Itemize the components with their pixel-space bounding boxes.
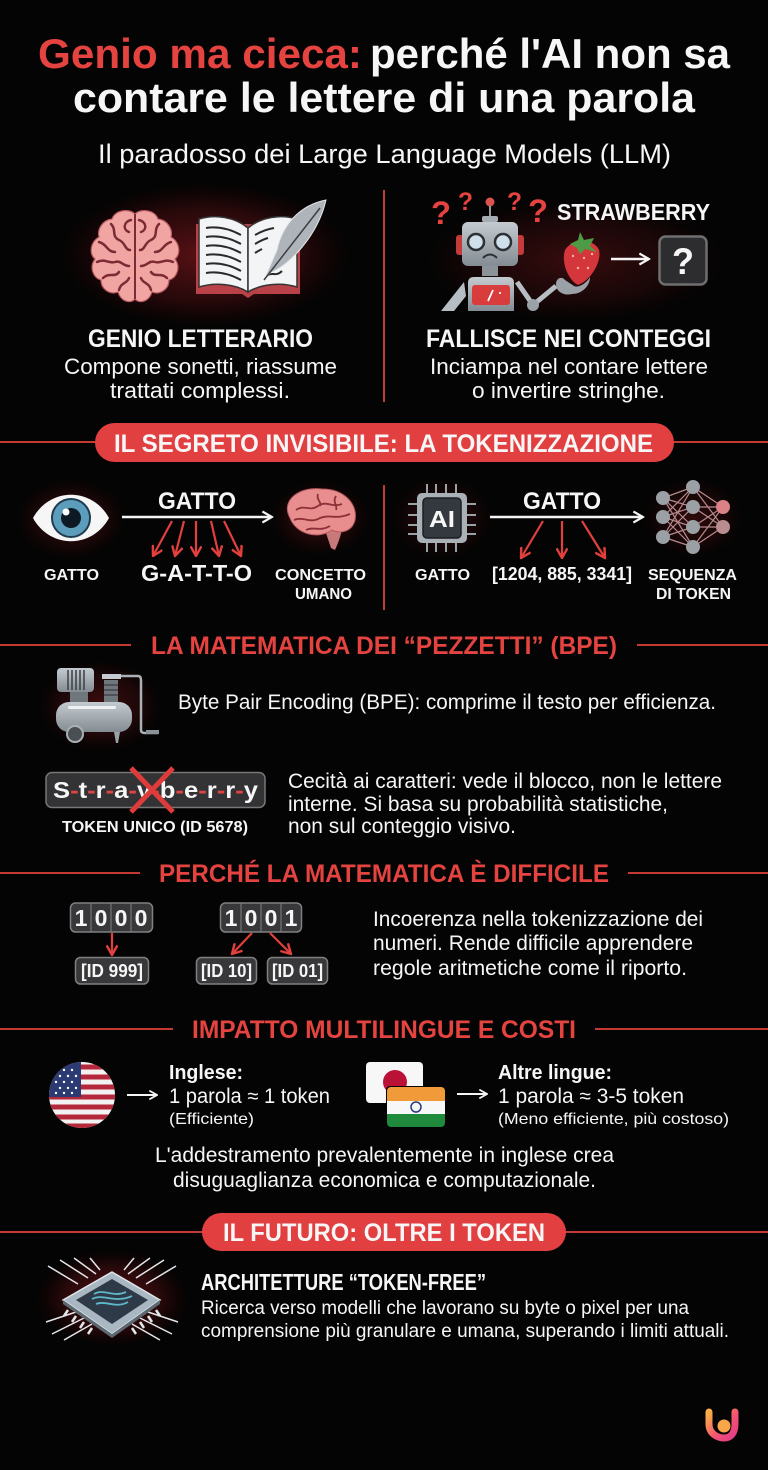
panel: genio letterario <box>60 183 350 403</box>
text block <box>288 770 722 838</box>
red arrows <box>232 933 291 954</box>
id box <box>268 958 328 984</box>
icon: usa flag <box>49 1062 115 1128</box>
icon: japan and india flags <box>366 1062 446 1128</box>
panel: multilingue <box>49 1062 729 1192</box>
panel: futuro <box>36 1250 729 1346</box>
text block: inglese: 1 parola ≈ 1 token <box>169 1085 330 1108</box>
text block <box>201 1298 729 1342</box>
label: gatto: GATTO <box>415 567 470 584</box>
icon: strawberry <box>556 232 599 295</box>
label: concetto umano: UMANO <box>295 586 352 603</box>
section heading: bpe: LA MATEMATICA DEI “PEZZETTI” (BPE) <box>151 632 617 660</box>
panel: bpe <box>38 660 722 838</box>
panel: fallisce nei conteggi <box>425 188 725 403</box>
subtitle: Il paradosso dei Large Language Models (LLM) <box>98 139 671 169</box>
label: sequenza di token <box>648 567 737 603</box>
label: strawberry: STRAWBERRY <box>557 199 710 225</box>
text block: trattati complessi. <box>110 378 290 403</box>
text block: disuguaglianza: disuguaglianza economica e computazionale. <box>173 1169 596 1192</box>
text block: disuguaglianza: L'addestramento prevalentemente in inglese crea <box>155 1144 614 1167</box>
heading: FALLISCE NEI CONTEGGI <box>426 325 711 353</box>
section heading: matematica: PERCHÉ LA MATEMATICA È DIFFICILE <box>159 859 609 888</box>
text block <box>64 354 337 403</box>
text block: altre lingue: Altre lingue: <box>498 1062 612 1084</box>
text block <box>373 908 703 980</box>
text block: Inciampa nel contare lettere <box>430 354 708 379</box>
icon: side brain <box>270 480 370 556</box>
icon: compressor <box>56 668 159 743</box>
number boxes: 1001: 0 <box>245 905 257 931</box>
arrow: ai reading <box>490 516 643 518</box>
heading: GENIO LETTERARIO <box>88 325 313 353</box>
icon: confused robot <box>441 198 556 311</box>
label: gatto: GATTO <box>44 567 99 584</box>
text block: inglese <box>169 1062 330 1128</box>
text block <box>430 354 708 403</box>
number boxes: 1001: 1 <box>285 905 298 931</box>
section heading: futuro <box>202 1213 566 1251</box>
text block: regole aritmetiche come il riporto. <box>373 957 687 980</box>
id box: [ID 01] <box>272 961 323 981</box>
number boxes: 1000: 0 <box>115 905 127 931</box>
text block: Compone sonetti, riassume <box>64 354 337 379</box>
text block: interne. Si basa su probabilità statistiche, <box>288 793 668 816</box>
token box: S-t-r-a-v-b-e-r-r-y <box>53 777 258 803</box>
title <box>38 30 731 121</box>
icon: logo <box>709 1412 735 1438</box>
red cross <box>131 768 173 812</box>
id box: [ID 999] <box>81 961 143 981</box>
text block: comprensione più granulare e umana, superando i limiti attuali. <box>201 1321 729 1342</box>
icon: question marks <box>431 188 548 231</box>
letters: G-A-T-T-O <box>141 560 252 586</box>
icon: question marks: ? <box>458 188 473 216</box>
id box <box>196 958 256 984</box>
icon: isometric chip <box>36 1250 188 1346</box>
number boxes: 1000: 0 <box>95 905 107 931</box>
token ids: [1204, 885, 3341] <box>492 564 632 584</box>
title: Genio ma cieca: <box>38 30 362 77</box>
text block: Byte Pair Encoding (BPE): comprime il testo per efficienza. <box>178 691 716 714</box>
icon: question marks: ? <box>431 195 451 231</box>
icon: ai chip <box>408 484 476 552</box>
section heading: futuro: IL FUTURO: OLTRE I TOKEN <box>223 1219 545 1247</box>
label: sequenza di token: DI TOKEN <box>656 586 731 603</box>
text block: altre lingue: (Meno efficiente, più costoso) <box>498 1111 729 1128</box>
number boxes: 1001: 0 <box>265 905 277 931</box>
icon: brain top view <box>91 211 179 302</box>
arrow <box>457 1093 487 1095</box>
section heading: multilingue: IMPATTO MULTILINGUE E COSTI <box>192 1016 576 1044</box>
text block: altre lingue <box>498 1062 729 1128</box>
icon: question box: ? <box>672 241 694 282</box>
label: concetto umano <box>275 567 366 603</box>
text block: altre lingue: 1 parola ≈ 3-5 token <box>498 1085 684 1108</box>
text block: Ricerca verso modelli che lavorano su byte o pixel per una <box>201 1298 689 1319</box>
icon: eye <box>33 495 109 541</box>
panel: lettura ai <box>392 476 743 603</box>
text block: Cecità ai caratteri: vede il blocco, non le lettere <box>288 770 722 793</box>
text block: disuguaglianza <box>155 1144 614 1192</box>
icon: question marks: ? <box>528 193 548 229</box>
text block: numeri. Rende difficile apprendere <box>373 932 693 955</box>
red arrow <box>111 933 113 955</box>
icon: ai chip: AI <box>429 506 455 532</box>
id box <box>76 958 148 984</box>
label: concetto umano: CONCETTO <box>275 567 366 584</box>
icon: question marks: ? <box>507 188 522 216</box>
icon: neural network <box>643 478 743 558</box>
red arrows: tokens <box>521 521 605 558</box>
token label: TOKEN UNICO (ID 5678) <box>62 819 248 836</box>
number boxes: 1001: 1 <box>225 905 238 931</box>
id box: [ID 10] <box>201 961 252 981</box>
text block: Incoerenza nella tokenizzazione dei <box>373 908 703 931</box>
number boxes: 1000: 0 <box>135 905 147 931</box>
arrow: human reading <box>122 516 272 518</box>
text block: inglese: Inglese: <box>169 1062 243 1084</box>
label: gatto above arrow: GATTO <box>523 488 601 515</box>
arrow <box>127 1094 157 1096</box>
arrow <box>611 258 649 260</box>
red arrows: letters <box>153 521 241 556</box>
number boxes: 1000: 1 <box>75 905 88 931</box>
number boxes: 1000 <box>70 903 152 932</box>
icon: question box <box>660 236 706 284</box>
icon: open book with quill <box>196 200 326 298</box>
panel: lettura umana <box>16 479 370 603</box>
heading: ARCHITETTURE “TOKEN-FREE” <box>201 1269 486 1295</box>
panel: numeri <box>70 903 703 984</box>
text block: o invertire stringhe. <box>472 378 665 403</box>
text block: inglese: (Efficiente) <box>169 1111 254 1128</box>
title: perché l'AI non sa <box>370 30 731 77</box>
label: gatto above arrow: GATTO <box>158 488 236 515</box>
text block: non sul conteggio visivo. <box>288 815 516 838</box>
title: contare le lettere di una parola <box>73 74 696 121</box>
token box <box>46 768 265 812</box>
number boxes: 1001 <box>220 903 302 932</box>
section heading: tokenizzazione <box>95 423 674 462</box>
section heading: tokenizzazione: IL SEGRETO INVISIBILE: LA TOKENIZZAZIONE <box>114 430 653 458</box>
label: sequenza di token: SEQUENZA <box>648 567 737 584</box>
